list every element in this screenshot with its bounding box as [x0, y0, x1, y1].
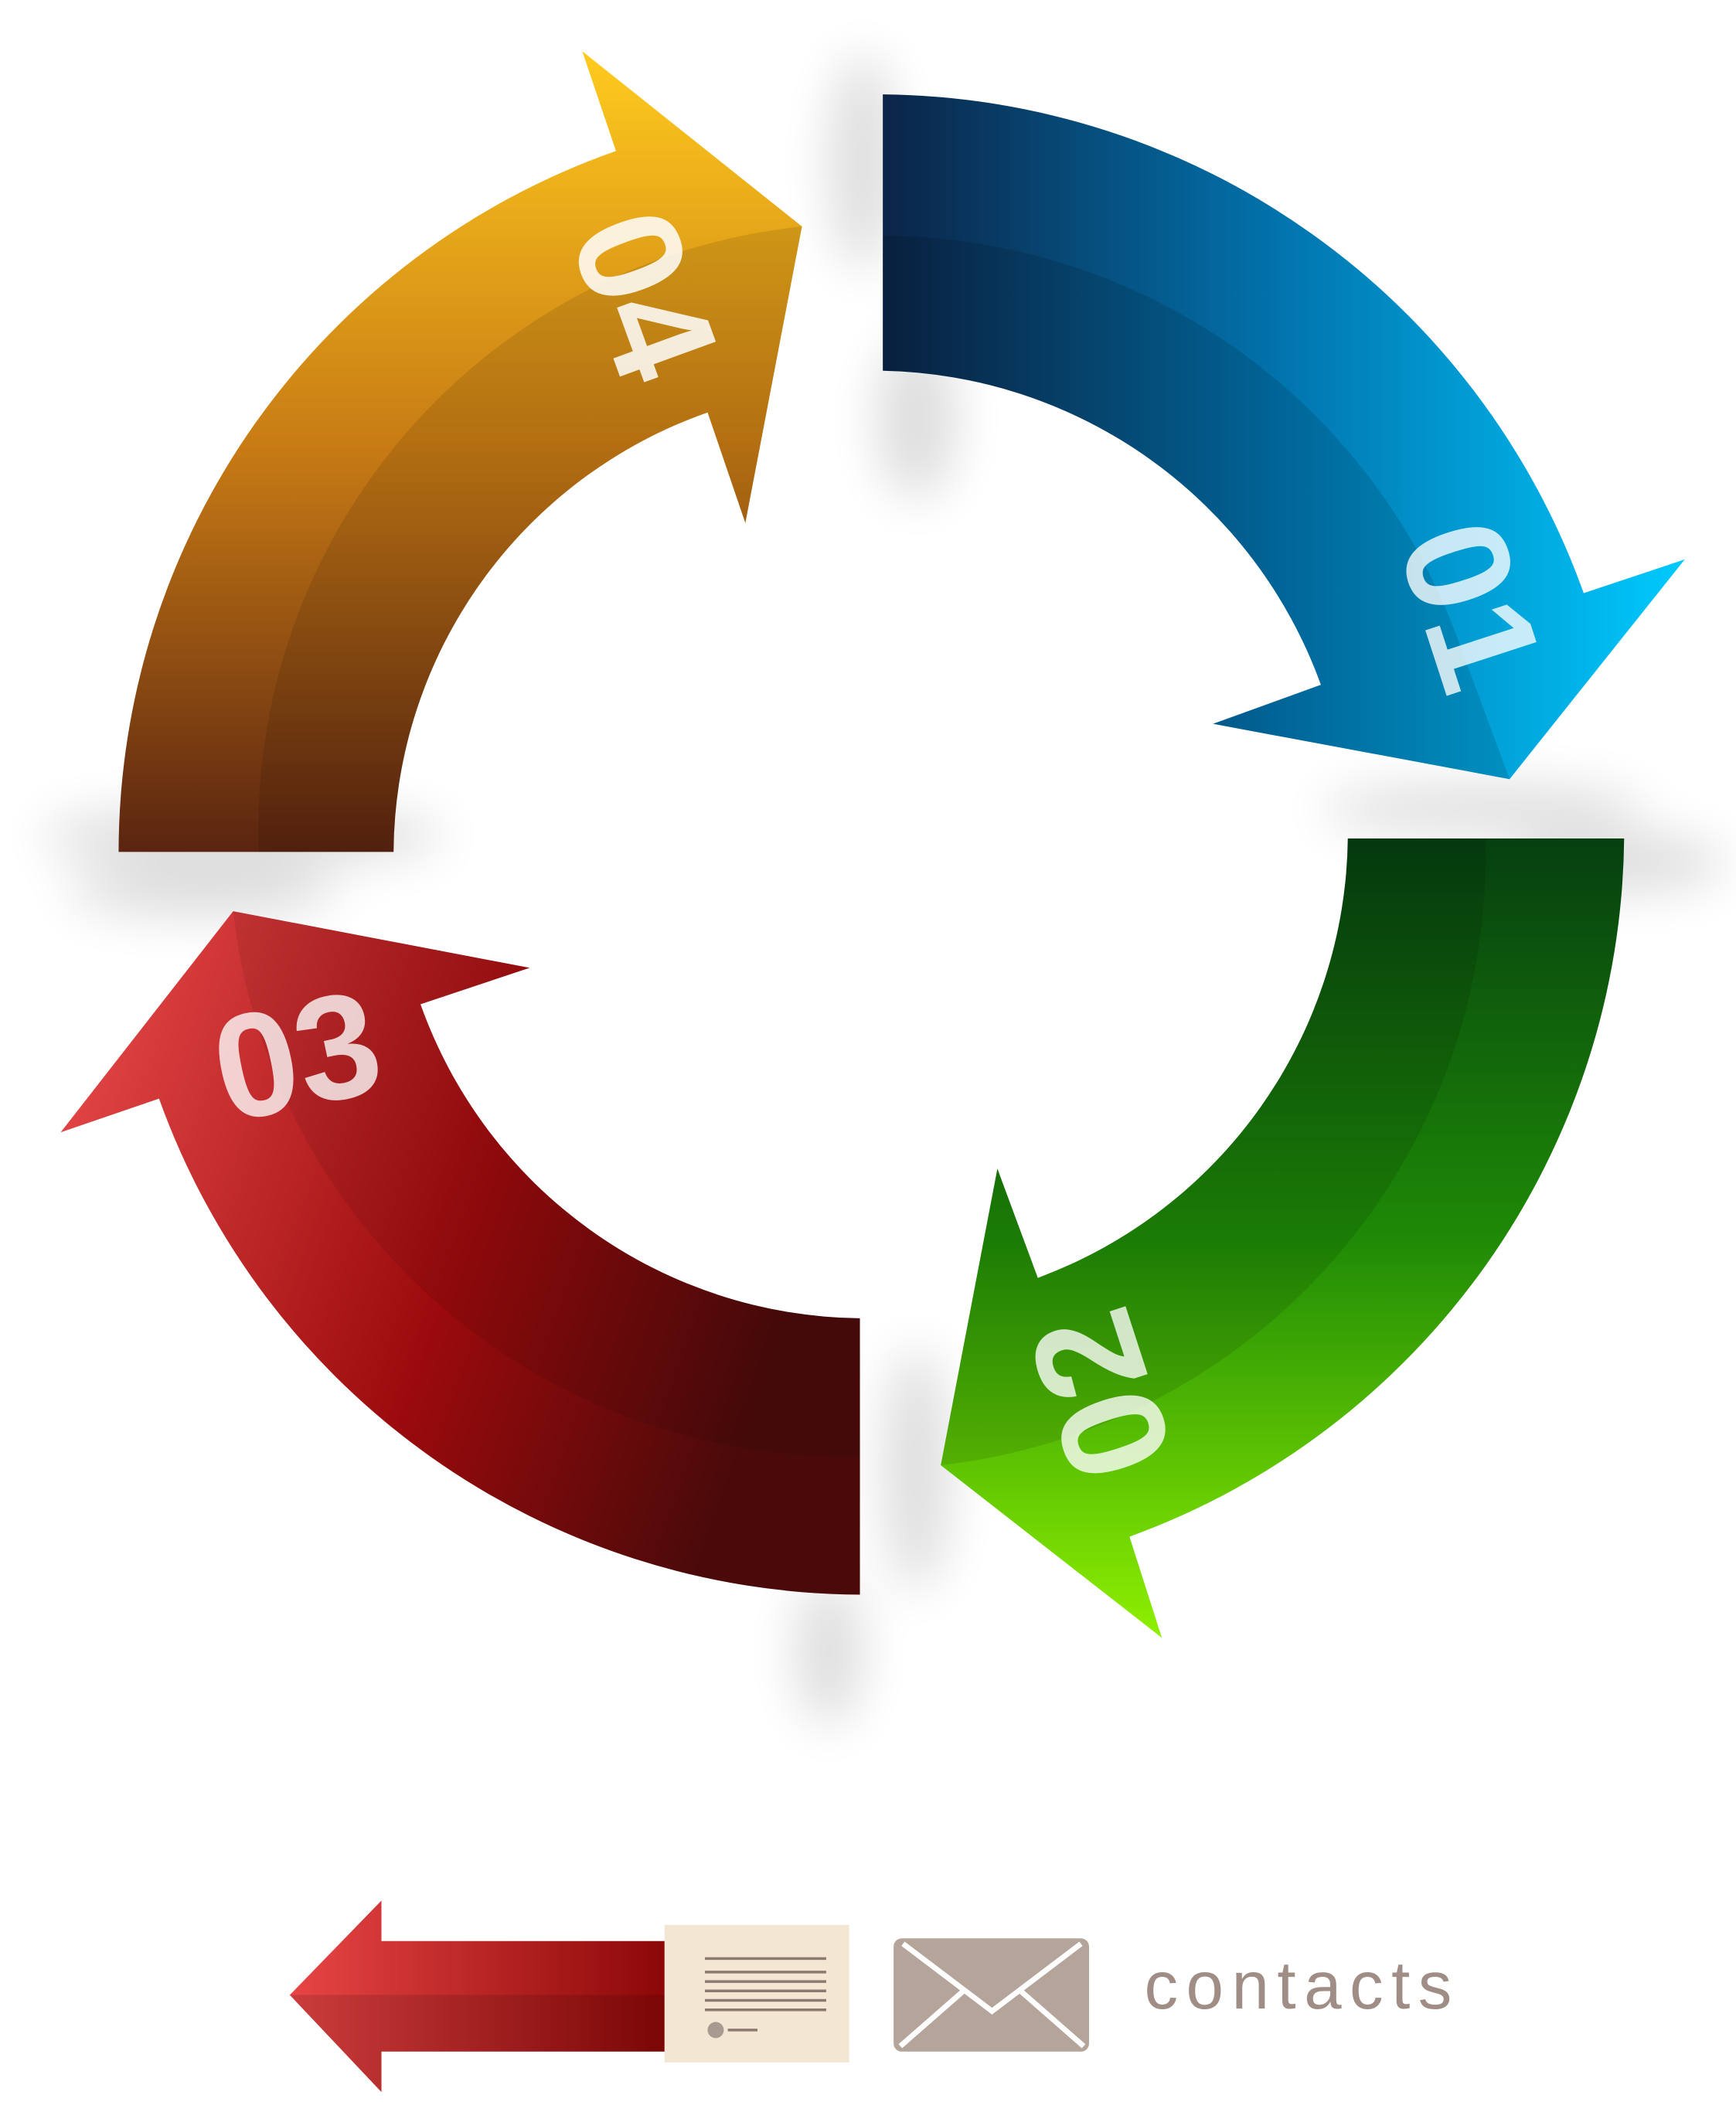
number 03: 03: [199, 957, 395, 1154]
arrow: 02 green: [941, 838, 1624, 1638]
number 04: 04: [539, 189, 751, 401]
card: [665, 1925, 849, 2063]
shadows: [40, 54, 1725, 1726]
arrow: 04 orange: [118, 51, 802, 852]
number 02: 02: [996, 1291, 1205, 1499]
arrow: 01 blue: [883, 94, 1685, 779]
number 01: 01: [1367, 502, 1576, 709]
contacts text: contacts: [1144, 1948, 1460, 2023]
bottom arrow: [290, 1900, 674, 2092]
icon: envelope: [894, 1938, 1089, 2052]
arrow: 03 red: [60, 911, 860, 1594]
